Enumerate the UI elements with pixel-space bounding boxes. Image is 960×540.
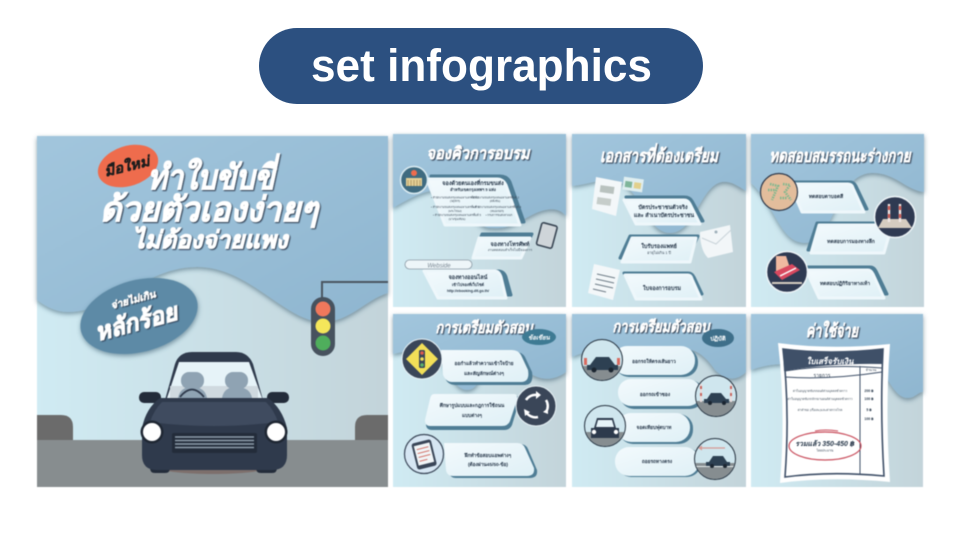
total circled: รวมแล้ว 350-450 ฿ <box>795 440 855 448</box>
heading: ทดสอบสมรรถนะร่างกาย <box>770 146 912 166</box>
card: depth vision: ทดสอบการมองทางลึก <box>827 238 875 245</box>
card: in person: (พระโขนง) <box>448 209 462 213</box>
receipt: 5 ฿ <box>866 408 872 412</box>
card: road rules <box>425 394 519 430</box>
card: in person: • สำนักงานขนส่งกรุงเทพมหานครพื้นที่ 5 <box>433 213 481 218</box>
receipt: ใบเสร็จรับเงิน <box>806 356 854 366</box>
card: reverse: ถอยรถทางตรง <box>642 459 673 465</box>
card: telephone: จองทางโทรศัพท์ <box>491 240 530 248</box>
badge: price: หลักร้อย <box>92 298 182 347</box>
icon: car front <box>584 406 626 446</box>
badge: beginner <box>92 137 164 195</box>
card: in person: • สำนักงานขนส่งกรุงเทพมหานครพื้นที่ 4 <box>473 205 521 210</box>
badge: price: จ่ายไม่เกิน <box>109 287 158 312</box>
icon: building pin <box>400 166 428 194</box>
card: parking <box>618 379 704 409</box>
total circled: โดยประมาณ <box>817 448 834 452</box>
card: in person <box>428 176 524 225</box>
card: depth vision <box>808 223 892 253</box>
icon: ID card <box>622 177 644 192</box>
card: medical certificate <box>620 236 698 262</box>
receipt: ค่าคำขอ (เรื่องละ)และค่าตรวจโรค <box>798 407 842 412</box>
search bar: Webside <box>427 264 451 270</box>
card: online <box>424 271 511 298</box>
card: road signs <box>441 350 532 385</box>
search bar <box>405 260 472 270</box>
card: in person: สำหรับเขตกรุงเทพฯ 5 แห่ง <box>450 187 496 193</box>
card: practice test <box>444 443 537 478</box>
card: reverse <box>615 447 701 477</box>
total circled <box>789 430 861 460</box>
receipt: 100 ฿ <box>864 417 874 421</box>
card: kerb parking <box>617 413 693 444</box>
receipt: รายการ <box>814 373 831 379</box>
badge: practical <box>702 329 734 347</box>
sky wave <box>572 314 746 379</box>
right kerb <box>355 415 388 440</box>
card: medical certificate: อายุไม่เกิน 1 ปี <box>647 250 672 256</box>
card: telephone <box>473 234 532 258</box>
card: road rules: ศึกษารูปแบบและกฎการใช้ถนน <box>440 402 505 410</box>
card: forward driving <box>613 346 698 377</box>
panel: main cover <box>37 136 388 487</box>
card: parking: ออกรถเข้าซอง <box>640 391 671 398</box>
sky wave <box>751 314 923 398</box>
icon: smartphone <box>536 222 558 249</box>
card: in person: • สำนักงานขนส่งกรุงเทพมหานครพื้นที่ 2 <box>471 196 519 200</box>
panel: expenses <box>751 314 923 487</box>
card: telephone: งานทดสอบสำเร็จไม่มีจองการ <box>488 246 532 252</box>
card: in person: (หนองจอก) <box>490 209 504 213</box>
heading: เอกสารที่ต้องเตรียม <box>600 143 720 166</box>
panel: practical test preparation <box>572 314 746 487</box>
sky wave <box>572 134 746 233</box>
card: road rules: แบบต่างๆ <box>462 413 482 419</box>
card: in person: • สำนักงานขนส่งกรุงเทพมหานครพื้นที่ 3 <box>431 205 479 210</box>
card: in person: (จตุจักร) <box>450 199 460 204</box>
panel: physical test <box>751 134 924 307</box>
car illustration <box>139 352 289 474</box>
panel: documents <box>572 134 746 307</box>
sky wave <box>37 136 388 322</box>
receipt: 100 ฿ <box>864 397 874 401</box>
icon: envelope <box>700 225 733 258</box>
card: practice test: (ต้องผ่าน45/50-ข้อ) <box>468 461 508 468</box>
sky wave <box>393 314 566 390</box>
main heading <box>100 153 321 254</box>
icon: car reverse <box>694 438 736 480</box>
receipt: จำนวน <box>866 368 877 372</box>
card: training certificate: ใบจองการอบรม <box>643 284 681 292</box>
card: ID <box>624 197 703 224</box>
title banner: set infographics <box>311 40 652 91</box>
road <box>37 440 388 487</box>
sky wave <box>393 134 566 228</box>
card: kerb parking: จอดเทียบฟุตบาท <box>637 424 671 431</box>
main heading: ด้วยตัวเองง่ายๆ <box>100 191 321 229</box>
icon: warning sign <box>402 339 442 379</box>
badge: written <box>522 329 556 345</box>
card: online: เข้าไปจองที่เว็บไซต์ <box>452 281 485 287</box>
sky wave <box>751 134 924 243</box>
main heading: ทำใบขับขี่ <box>148 153 281 197</box>
heading: การเตรียมตัวสอบ <box>612 318 711 336</box>
card: medical certificate: ใบรับรองแพทย์ <box>641 242 677 250</box>
card: road signs: ออกำแล้วทำความเข้าใจป้าย <box>454 360 514 367</box>
card: online: http://ebooking.dlt.go.th/ <box>447 289 489 293</box>
card: in person: • สำนักงานขนส่งกรุงเทพมหานครพื้นที่ 1 <box>431 196 479 200</box>
badge: price <box>72 266 206 366</box>
receipt: ค่าใบอนุญาตขับรถจักรยานยนต์ส่วนบุคคลชั่วคราว <box>788 397 853 402</box>
icon: phone exam <box>404 434 444 474</box>
card: colour vision <box>790 182 867 212</box>
receipt <box>778 343 890 483</box>
panel: book training <box>393 134 566 307</box>
heading: จองคิวการอบรม <box>426 144 531 163</box>
card: practice test: ฝึกทำข้อสอบแอพต่างๆ <box>464 452 512 459</box>
icon: document <box>588 264 620 300</box>
icon: roundabout <box>516 386 556 426</box>
card: in person: (ตลิ่งชัน) <box>490 199 500 203</box>
icon: foot on pedal <box>766 252 808 292</box>
card: ID: และ สำเนาบัตรประชาชน <box>634 211 694 219</box>
card: in person: • กรมการขนส่งทางบก <box>486 213 513 217</box>
receipt: 200 ฿ <box>864 389 874 393</box>
main heading: ไม่ต้องจ่ายแพง <box>132 226 290 254</box>
icon: copy of paper <box>592 177 622 216</box>
card: reaction <box>806 267 887 298</box>
card: ID: บัตรประชาชนตัวจริง <box>638 203 688 211</box>
title banner <box>259 28 703 104</box>
panel: written test preparation <box>393 314 566 487</box>
left kerb <box>37 415 73 440</box>
heading: การเตรียมตัวสอบ <box>436 319 534 337</box>
card: in person: (บางขุนเทียน) <box>449 217 465 222</box>
icon: depth poles <box>874 196 916 238</box>
badge: practical: ปฏิบัติ <box>710 334 726 342</box>
card: forward driving: ออกรถให้ตรงเส้นยาว <box>632 358 676 365</box>
icon: car parking <box>696 376 736 417</box>
card: online: จองทางออนไลน์ <box>449 273 488 281</box>
card: training certificate <box>624 273 702 299</box>
receipt: ค่าใบอนุญาตขับรถยนต์ส่วนบุคคลชั่วคราว <box>793 389 847 394</box>
traffic light <box>311 282 388 356</box>
heading: ค่าใช้จ่าย <box>806 320 859 341</box>
icon: car forward <box>582 340 622 382</box>
icon: colour test plate <box>760 174 798 210</box>
card: reaction: ทดสอบปฏิกิริยาทางเท้า <box>820 280 870 287</box>
card: in person: จองด้วยตนเองที่กรมขนส่ง <box>442 179 504 187</box>
badge: beginner: มือใหม่ <box>103 152 153 179</box>
card: road signs: และสัญลักษณ์ต่างๆ <box>464 370 504 377</box>
badge: written: ข้อเขียน <box>528 334 551 342</box>
card: colour vision: ทดสอบตาบอดสี <box>809 193 844 200</box>
